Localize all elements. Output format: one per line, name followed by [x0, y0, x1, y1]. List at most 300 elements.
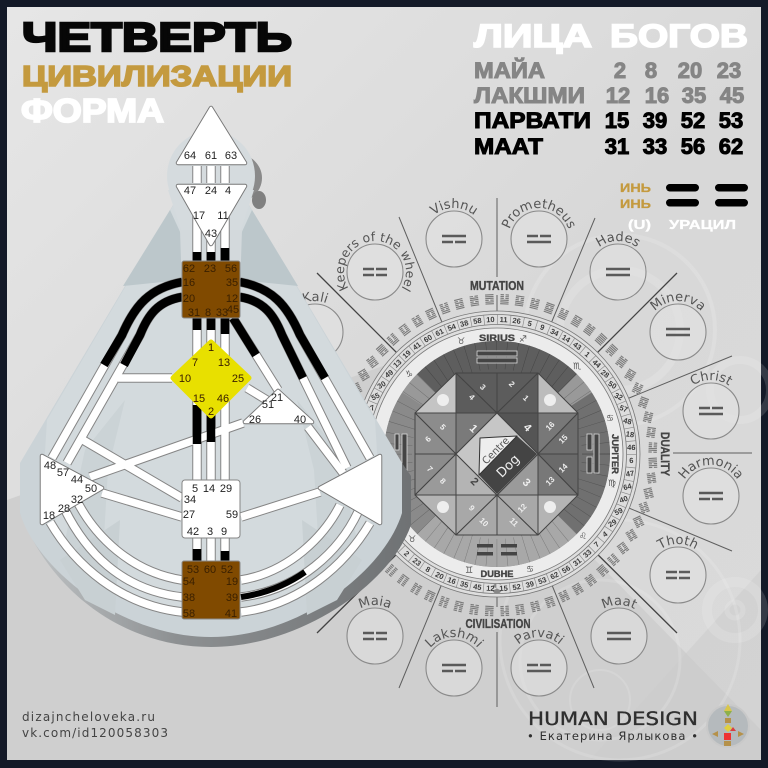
gate numbers ring: 11 [499, 315, 508, 324]
gate numbers ring: 62 [549, 570, 560, 581]
wheel labels: JUPITER [610, 434, 620, 475]
gates: root: 53 [187, 564, 199, 576]
octagon numbers: 13 [544, 475, 557, 488]
zodiac signs [405, 335, 616, 576]
gate numbers ring: 43 [571, 340, 583, 352]
gates: throat: 35 [226, 277, 238, 289]
hexagram ring: ䷅ [647, 455, 658, 469]
hexagram ring: ䷶ [349, 379, 364, 396]
title: ФОРМА [21, 92, 164, 129]
circle: Vishnu: Vishnu [428, 198, 478, 215]
gates: G: 7 [192, 357, 198, 369]
octagon numbers: 14 [557, 462, 570, 475]
octagon numbers: 3 [520, 476, 533, 489]
hexagram ring: ䷰ [364, 353, 380, 370]
contacts: vk.com/id120058303 [22, 726, 168, 740]
gates: sacral: 9 [221, 526, 227, 538]
circle: Maat [590, 596, 648, 664]
table: gods and gates: 15 [605, 108, 629, 133]
hexagram ring: ䷼ [423, 305, 438, 322]
octagon numbers: 7 [425, 464, 435, 474]
hexagram ring: ䷀ [593, 330, 610, 347]
gate numbers ring: 16 [446, 575, 457, 586]
legend: yin bars [666, 184, 748, 206]
gates: ajna: 17 [193, 210, 205, 222]
gates: throat: 23 [204, 263, 216, 275]
hexagram ring: ䷫ [604, 341, 621, 358]
octagon numbers: 3 [478, 382, 488, 392]
gates: sacral: 14 [203, 483, 215, 495]
hexagram ring: ䷋ [484, 603, 495, 618]
gates: heart: 26 [249, 414, 261, 426]
gate numbers ring: 29 [607, 517, 618, 529]
hexagram ring: ䷲ [343, 499, 357, 515]
hexagram ring: ䷹ [468, 292, 480, 308]
table: gods and gates: ЛАКШМИ [474, 83, 585, 108]
heading: faces of the gods [474, 18, 748, 54]
wheel labels [466, 278, 672, 631]
gates: sacral: 29 [220, 483, 232, 495]
gates: sacral [183, 483, 238, 538]
gate numbers ring: 51 [365, 494, 376, 505]
gates: throat: 56 [225, 263, 237, 275]
circle: Maat: Maat [602, 596, 638, 609]
gate numbers ring: 3 [377, 518, 386, 528]
gates: root: 58 [183, 608, 195, 620]
inner sector ring [384, 341, 610, 567]
hexagram ring: ䷒ [384, 330, 401, 347]
octagon numbers: 6 [423, 434, 433, 444]
gate numbers ring: 4 [601, 529, 610, 539]
hexagram ring: ䷬ [468, 601, 480, 616]
brand [527, 708, 698, 743]
table: gods and gates [474, 58, 744, 159]
gate numbers ring: 54 [446, 321, 458, 333]
gate numbers ring: 38 [459, 318, 469, 329]
hexagram ring: ䷷ [569, 580, 585, 597]
hexagram ring: ䷔ [339, 484, 352, 501]
gates: root: 19 [226, 576, 238, 588]
gates: root [183, 564, 238, 620]
hexagram ring: ䷃ [614, 539, 631, 556]
gate numbers ring: 33 [581, 548, 593, 560]
gate numbers ring: 26 [512, 316, 521, 326]
zodiac signs: ♐ [519, 335, 527, 345]
gate numbers ring: 53 [537, 575, 548, 586]
centre: ajna white core [178, 186, 245, 244]
octagon numbers: 11 [508, 516, 520, 529]
centre: sacral [182, 480, 240, 538]
circle: Minerva: Minerva [650, 294, 704, 310]
gates: sacral: 42 [187, 526, 199, 538]
octagon numbers: 1 [521, 393, 531, 403]
panel: bodygraph silhouette [20, 131, 411, 647]
gates: spleen: 48 [44, 460, 56, 472]
centre: ajna [178, 186, 245, 244]
centre: solar plexus [320, 456, 380, 523]
gate numbers ring: 17 [359, 469, 369, 479]
gate numbers ring: 34 [549, 327, 561, 339]
gates: head: 63 [225, 150, 237, 162]
table: gods and gates: 35 [682, 83, 706, 108]
table: gods and gates: 52 [681, 108, 705, 133]
gate numbers ring: 2 [402, 549, 411, 558]
table: gods and gates: 33 [643, 134, 667, 159]
gates: spleen: 50 [85, 483, 97, 495]
hexagram ring: ䷁ [383, 561, 400, 579]
heading: faces of the gods: ЛИЦА [474, 18, 592, 54]
hexagram ring: ䷎ [499, 603, 510, 618]
gate numbers ring: 13 [391, 358, 403, 370]
hexagram ring: ䷄ [528, 295, 542, 311]
gates: G [179, 342, 244, 418]
hexagram ring: ䷢ [452, 598, 466, 614]
hexagram ring: ䷥ [452, 295, 466, 311]
table: gods and gates: 53 [719, 108, 743, 133]
gate numbers ring: 52 [512, 582, 521, 592]
gate numbers ring: 19 [401, 348, 413, 360]
legend: uracil: (U) [628, 217, 651, 232]
table: gods and gates: МААТ [474, 134, 544, 159]
hexagram ring: ䷗ [373, 551, 390, 568]
gates: ajna: 47 [184, 185, 196, 197]
gates: throat: 62 [183, 263, 195, 275]
gates: throat: 20 [183, 293, 195, 305]
gate numbers ring: 50 [607, 379, 618, 391]
gates: root: 41 [225, 608, 237, 620]
gates: throat [183, 263, 239, 319]
centre: heart [245, 391, 312, 422]
bars: bottom trigram [477, 544, 517, 556]
gate numbers ring: 24 [391, 538, 404, 551]
gate numbers ring: 40 [618, 494, 629, 505]
gate numbers ring: 8 [424, 564, 432, 574]
gate numbers ring: 28 [599, 368, 611, 380]
gate numbers ring: 59 [613, 506, 624, 517]
hexagram ring: ䷌ [373, 341, 390, 358]
outer sector dividing lines [317, 198, 752, 707]
contacts: dizajncheloveka.ru [22, 710, 155, 724]
hexagram ring: ䷖ [395, 571, 412, 588]
hexagram ring: ䷭ [647, 440, 658, 454]
bars: top trigram [477, 351, 517, 363]
hexagram ring: ䷸ [636, 394, 651, 410]
hexagram ring: ䷱ [623, 366, 639, 383]
hexagram ring: ䷕ [337, 424, 349, 439]
gate numbers ring: 55 [370, 391, 381, 402]
gate numbers ring: 20 [434, 570, 445, 581]
gates: heart: 21 [271, 392, 283, 404]
table: gods and gates: 16 [645, 83, 669, 108]
zodiac signs: ♌ [579, 532, 587, 542]
centre: throat [182, 261, 240, 318]
contacts [22, 710, 168, 740]
table: gods and gates: 56 [681, 134, 705, 159]
gate numbers ring: 37 [365, 403, 376, 414]
gate numbers ring: 46 [627, 443, 636, 452]
circle: Hades: Hades [596, 231, 640, 246]
circle: Minerva [650, 294, 706, 360]
octagon numbers [423, 379, 570, 529]
hexagram ring: ䷂ [355, 526, 371, 543]
zodiac signs: ♑ [405, 370, 413, 380]
gate numbers ring: 7 [592, 540, 601, 549]
title [21, 14, 292, 129]
circle: Maia [346, 596, 404, 664]
gates: ajna: 11 [217, 210, 229, 222]
octagon numbers: 8 [438, 476, 448, 486]
gate numbers ring: 9 [539, 322, 546, 332]
circle: Christ: Christ [690, 370, 732, 386]
table: gods and gates: 12 [606, 83, 630, 108]
logo [707, 704, 749, 747]
circle: Prometheus [501, 199, 574, 268]
gates: root: 54 [183, 576, 195, 588]
gate numbers ring: 49 [383, 368, 395, 380]
octagon numbers: 15 [557, 433, 570, 446]
brand: HUMAN DESIGN [528, 708, 698, 730]
hexagram ring: ䷘ [336, 455, 347, 469]
centre: root [182, 561, 240, 619]
gate numbers ring: 35 [459, 579, 469, 590]
octagon numbers: 4 [467, 392, 477, 402]
circle: Lakshmi [424, 628, 484, 696]
table: gods and gates: 31 [605, 134, 629, 159]
wheel labels: SIRIUS [479, 333, 515, 343]
zodiac signs: ♉ [408, 535, 416, 545]
hexagram ring: ䷩ [348, 513, 363, 530]
circle: Thoth: Thoth [656, 536, 698, 549]
gate numbers ring: 36 [358, 443, 367, 452]
hexagram ring: ䷜ [623, 526, 639, 543]
table: gods and gates: 23 [717, 58, 741, 83]
activated channel segments [104, 248, 325, 597]
gate numbers ring: 18 [625, 429, 635, 439]
circle: Prometheus: Prometheus [501, 199, 574, 228]
gate numbers ring: 45 [473, 582, 482, 592]
hexagram ring: ䷐ [336, 470, 349, 485]
gates: G: 13 [218, 357, 230, 369]
octagon numbers: 12 [516, 502, 529, 515]
zodiac signs: ♊ [465, 566, 473, 576]
gate numbers ring: 44 [591, 358, 603, 370]
gates: ajna: 4 [225, 185, 231, 197]
hexagram ring: ䷨ [396, 320, 413, 338]
gates: head [184, 150, 237, 162]
hexagram ring: ䷣ [336, 440, 347, 454]
circle: Vishnu [426, 198, 482, 268]
circle: Hades [590, 231, 646, 300]
centre: spleen [42, 456, 102, 523]
centre: spleen white core [42, 456, 102, 523]
hexagram ring: ䷚ [363, 539, 380, 556]
hexagram ring: ䷈ [542, 299, 557, 316]
hexagram ring: ䷵ [437, 299, 452, 316]
hexagram ring: ䷓ [422, 587, 438, 604]
hexagram ring: ䷏ [437, 593, 451, 610]
gates: spleen: 18 [43, 510, 55, 522]
octagon numbers: 2 [468, 475, 481, 488]
hexagram ring: ䷾ [339, 408, 353, 425]
hexagram ring: ䷆ [604, 551, 621, 568]
hexagram ring: ䷦ [528, 598, 542, 614]
gate numbers ring: 21 [361, 481, 372, 492]
gate numbers ring: 42 [370, 506, 381, 517]
hexagram ring: ䷯ [641, 408, 655, 425]
gate numbers ring: 61 [434, 327, 445, 338]
gate numbers ring: 6 [629, 456, 634, 465]
circle: Kali [302, 292, 344, 352]
gates: head: 61 [205, 150, 217, 162]
circle: Christ [682, 370, 740, 440]
gates: sacral: 59 [226, 509, 238, 521]
gates: G: 10 [179, 373, 191, 385]
hexagram ring: ䷍ [569, 312, 585, 329]
gate numbers ring: 30 [376, 379, 387, 391]
circle: Lakshmi: Lakshmi [424, 628, 484, 648]
table: gods and gates: 20 [678, 58, 702, 83]
gates: spleen [43, 460, 97, 522]
gate numbers ring: 1 [583, 350, 592, 359]
gates: head: 64 [184, 150, 196, 162]
octagon numbers: 4 [521, 421, 534, 435]
gate numbers ring: 60 [422, 333, 434, 345]
gates: throat: 12 [226, 293, 238, 305]
gate numbers ring: 48 [622, 416, 633, 427]
hexagram ring: ䷇ [409, 580, 425, 597]
gate numbers ring: 25 [358, 456, 367, 465]
gates: spleen: 28 [58, 503, 70, 515]
hexagram ring: ䷺ [631, 513, 646, 530]
gate numbers ring: 12 [486, 584, 495, 593]
gates: G: 15 [193, 393, 205, 405]
gate numbers ring: 63 [361, 416, 372, 427]
heading: faces of the gods: БОГОВ [610, 18, 748, 54]
gates: throat: 45 [227, 304, 239, 316]
gate numbers ring: 22 [359, 429, 369, 439]
hexagram ring: ䷮ [645, 470, 658, 485]
gates: ajna: 43 [205, 228, 217, 240]
hexagram ring: ䷳ [514, 601, 526, 616]
gates: throat: 8 [205, 307, 211, 319]
hexagram ring: ䷊ [499, 291, 510, 306]
octagon numbers: 9 [467, 503, 477, 513]
table: gods and gates: 2 [614, 58, 626, 83]
legend: yin labels: ИНЬ [620, 197, 651, 211]
gate numbers ring: 58 [473, 316, 482, 326]
zodiac signs: ♉ [457, 337, 465, 347]
octagon numbers: 5 [438, 422, 448, 432]
legend: uracil: УРАЦИЛ [669, 217, 736, 232]
gates: ajna [184, 185, 231, 240]
hexagram ring: ䷛ [614, 353, 630, 370]
wheel labels: MUTATION [470, 278, 524, 293]
circle: Parvati: Parvati [514, 630, 565, 644]
gates: ajna: 24 [205, 185, 217, 197]
gates: G: 1 [208, 342, 214, 354]
hexagram ring: ䷧ [637, 499, 651, 515]
zodiac signs: ♋ [526, 565, 534, 575]
hexagram ring: ䷟ [630, 379, 645, 396]
gates: sacral: 5 [192, 483, 198, 495]
gate numbers ring: 64 [622, 481, 633, 492]
table: gods and gates: 45 [720, 83, 744, 108]
hexagram ring: ䷝ [355, 366, 371, 383]
gates: spleen: 32 [71, 494, 83, 506]
gates: root: 60 [204, 564, 216, 576]
gates: sacral: 34 [184, 494, 196, 506]
circle: Harmonia: Harmonia [678, 458, 742, 479]
hexagram ring: ䷙ [514, 292, 526, 308]
dog label: Dog [494, 452, 523, 481]
gate numbers ring: 31 [571, 556, 583, 568]
gate numbers ring: 27 [383, 528, 395, 540]
corner dots [437, 394, 556, 513]
legend: yin labels: ИНЬ [620, 181, 651, 195]
hexagram ring: ䷠ [594, 561, 611, 579]
circle: Harmonia [678, 458, 742, 524]
circle: Maia: Maia [358, 596, 390, 608]
gates: root: 52 [221, 564, 233, 576]
octagon numbers: 10 [477, 516, 490, 529]
circle: Kali: Kali [302, 292, 328, 303]
table: gods and gates: ПАРВАТИ [474, 108, 591, 133]
wheel labels: DUALITY [658, 432, 672, 476]
hexagram ring: ䷽ [556, 587, 572, 604]
centre label: Centre [481, 436, 512, 467]
legend: uracil [628, 217, 736, 232]
gates: root: 38 [183, 592, 195, 604]
gate numbers ring: 57 [618, 403, 629, 414]
wheel labels: DUBHE [480, 569, 514, 579]
octagon numbers: 1 [467, 422, 480, 435]
gate numbers ring: 56 [560, 563, 572, 575]
hexagram ring: ䷉ [484, 291, 495, 306]
title: ЦИВИЛИЗАЦИИ [22, 61, 292, 93]
hexagram ring: ䷑ [645, 424, 657, 439]
hexagram ring: ䷿ [642, 484, 655, 501]
gates: sacral: 3 [207, 526, 213, 538]
gates: G: 2 [208, 406, 214, 418]
bodygraph channels [50, 166, 370, 612]
gates: heart: 40 [294, 414, 306, 426]
zodiac signs: ♏ [573, 362, 581, 372]
octagon numbers: 16 [544, 420, 557, 433]
gates: throat: 16 [183, 277, 195, 289]
hexagram ring: ䷴ [543, 593, 557, 610]
hexagram ring [336, 291, 658, 618]
wheel labels: CIVILISATION [466, 616, 530, 631]
gates: root: 39 [226, 592, 238, 604]
centre: heart white core [245, 391, 312, 422]
bars: left trigram [395, 434, 407, 473]
hexagram ring: ䷞ [582, 571, 599, 588]
centre: head [178, 108, 245, 163]
zodiac signs: ♋ [606, 414, 614, 424]
gates: sacral: 27 [183, 509, 195, 521]
table: gods and gates: 39 [643, 108, 667, 133]
gates: spleen: 57 [57, 467, 69, 479]
brand: • Екатерина Ярлыкова • [527, 729, 698, 743]
table: gods and gates: 8 [645, 58, 657, 83]
gate numbers ring: 10 [486, 315, 495, 324]
octagon diagram [415, 373, 578, 535]
zodiac signs: ♍ [608, 479, 616, 489]
hexagram ring: ䷪ [581, 320, 598, 338]
gate numbers ring: 15 [499, 584, 508, 593]
title: ЧЕТВЕРТЬ [22, 14, 292, 60]
hexagram ring: ䷻ [409, 312, 425, 329]
